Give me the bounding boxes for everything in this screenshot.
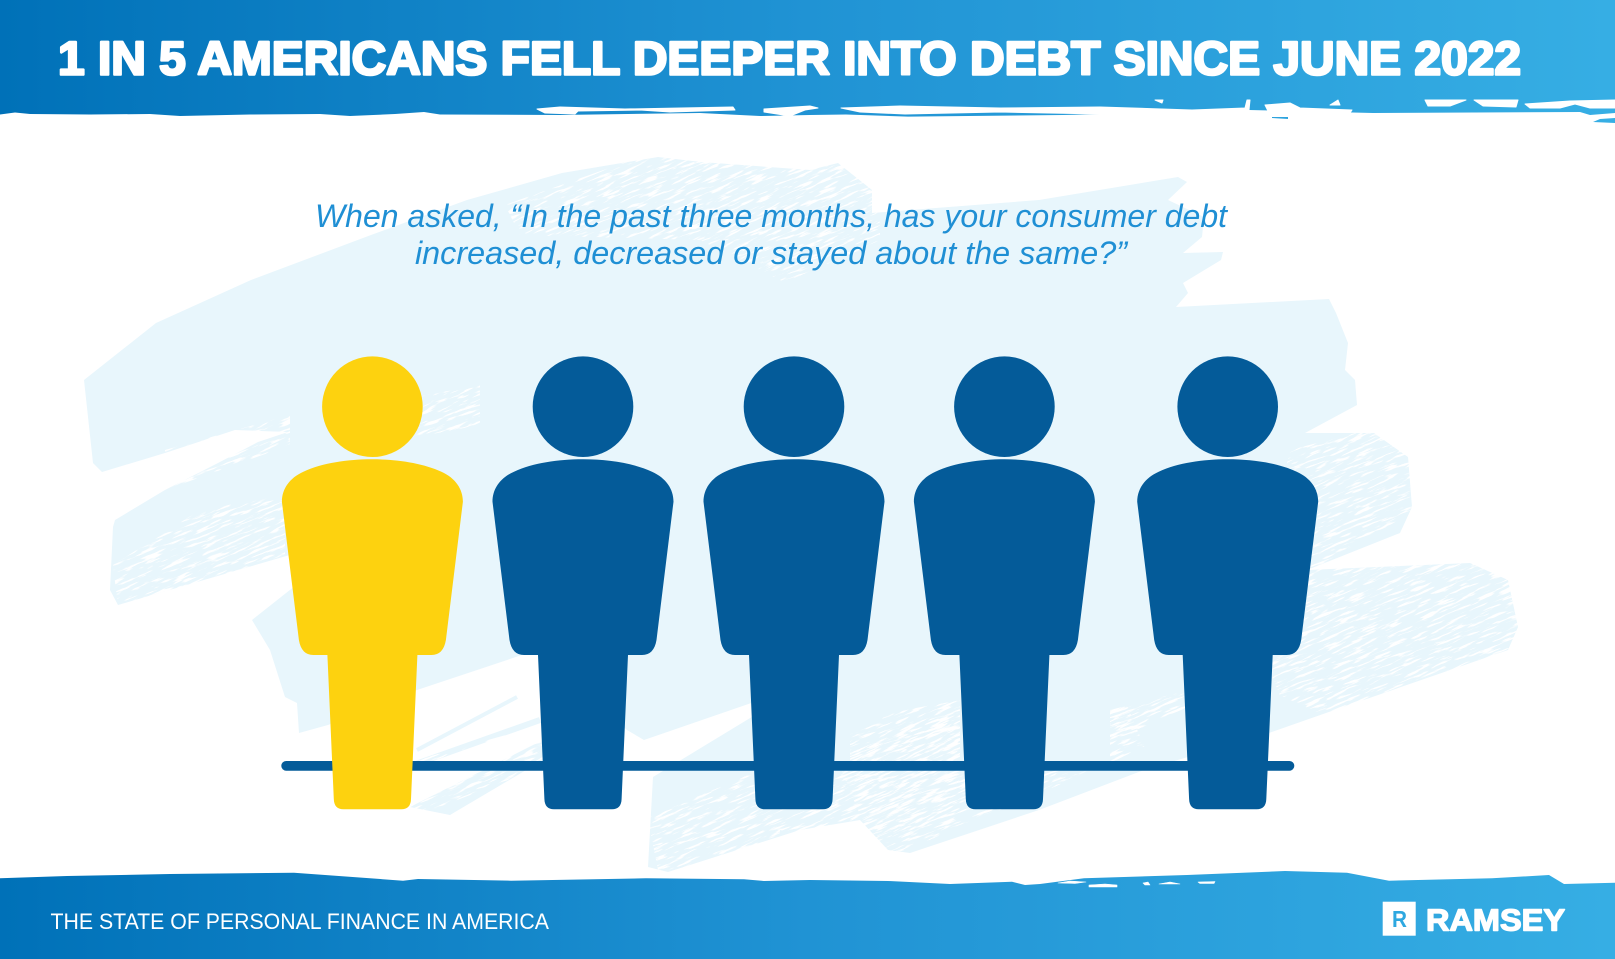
survey question bbox=[315, 198, 1229, 271]
pictogram: 1 in 5 people bbox=[282, 356, 1318, 809]
survey question: When asked, “In the past three months, has your consumer debt bbox=[315, 198, 1229, 234]
logo: Ramsey: RAMSEY bbox=[1426, 902, 1565, 938]
person 4: navy bbox=[914, 356, 1095, 809]
person 3: navy bbox=[704, 356, 884, 809]
title: 1 IN 5 AMERICANS FELL DEEPER INTO DEBT SINCE JUNE 2022 bbox=[58, 32, 1521, 86]
header band bbox=[0, 0, 1615, 123]
logo: Ramsey: R bbox=[1392, 906, 1407, 932]
footer band bbox=[0, 871, 1615, 959]
baseline rule bbox=[281, 761, 1294, 771]
background brush strokes bbox=[84, 157, 1518, 872]
person 5: navy bbox=[1137, 356, 1318, 809]
footer label: THE STATE OF PERSONAL FINANCE IN AMERICA bbox=[50, 909, 549, 934]
person 2: navy bbox=[492, 356, 674, 809]
survey question: increased, decreased or stayed about the same?” bbox=[415, 235, 1129, 271]
person 1: highlighted yellow bbox=[282, 356, 463, 809]
